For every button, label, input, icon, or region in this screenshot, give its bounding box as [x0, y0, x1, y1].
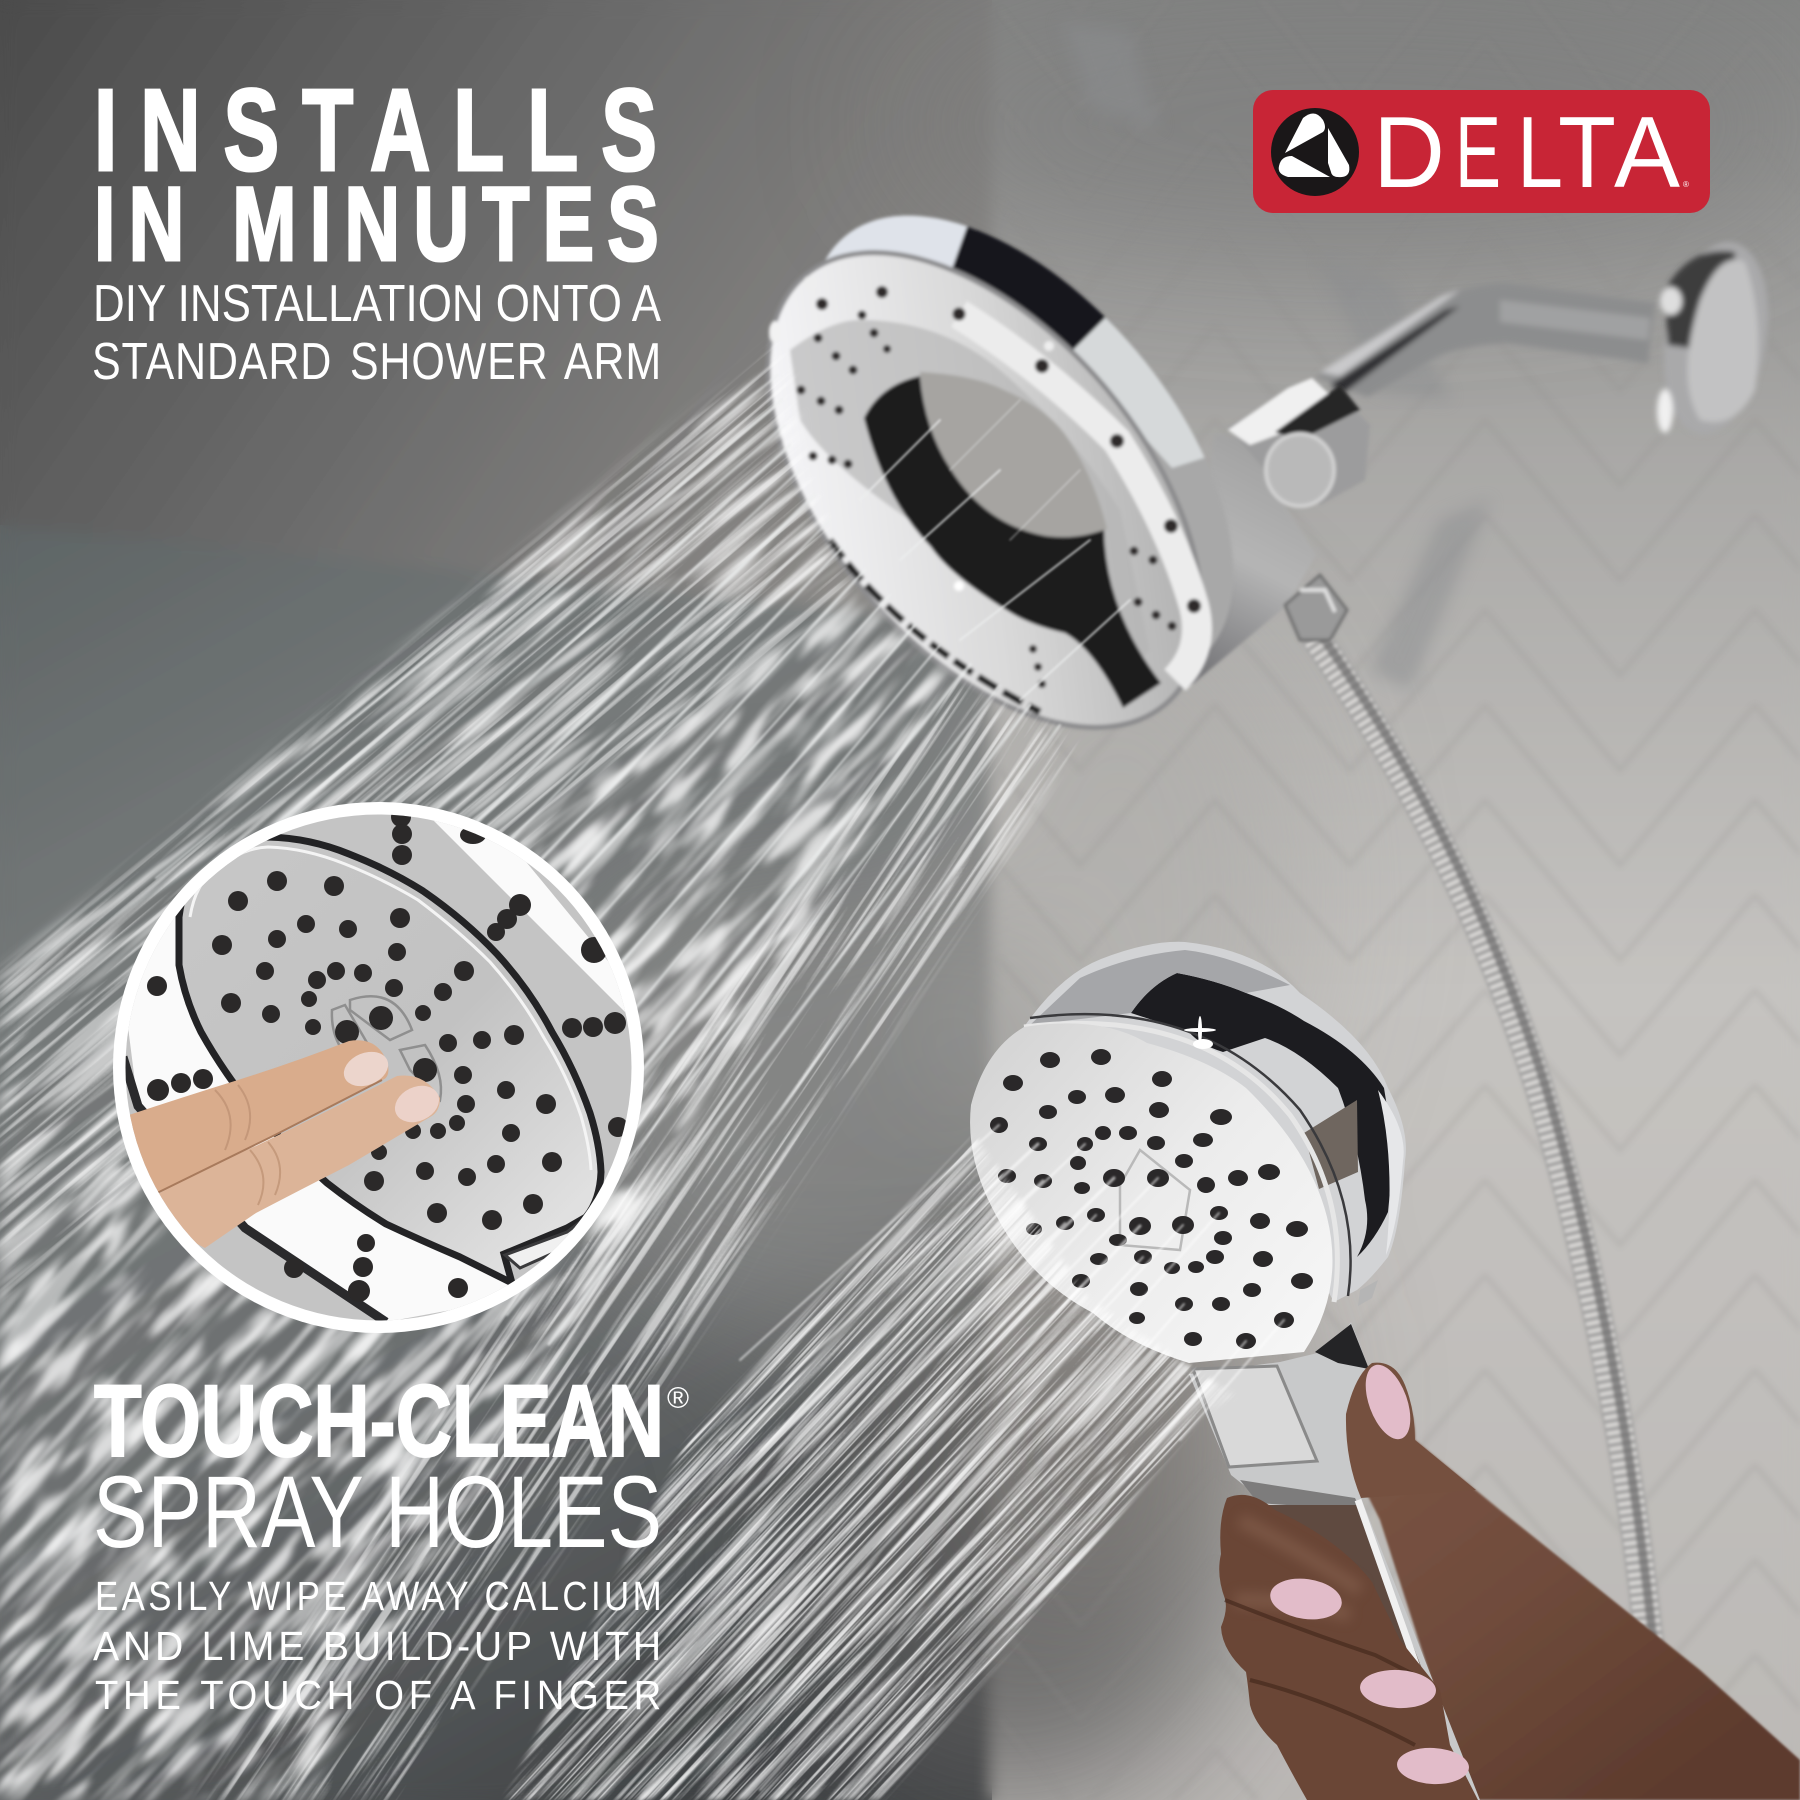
- back of the hand: [1345, 1385, 1800, 1800]
- text block: easily wipe away calcium: AND LIME BUILD-UP WITH: [93, 1623, 665, 1669]
- thumb gripping the handle: [1346, 1363, 1476, 1498]
- icon: Delta triangle emblem: [1271, 108, 1359, 196]
- heading: Touch-Clean spray holes: ®: [667, 1382, 689, 1415]
- hub and mount block connecting arm, head and hose: [1168, 378, 1370, 690]
- flexible metal hose: [1316, 636, 1654, 1650]
- inset circle: fingers wiping spray holes: [113, 800, 660, 1333]
- fingers: [120, 1040, 445, 1248]
- hand shower spray face with holes: [970, 1023, 1332, 1363]
- Delta logo badge: L: [1517, 97, 1563, 209]
- Delta logo badge: T: [1558, 97, 1616, 209]
- hand shower handle: [1189, 1322, 1480, 1800]
- Delta logo badge: [1253, 90, 1710, 213]
- shower arm and wall flange: [1315, 234, 1782, 442]
- large shower head ring: [766, 214, 1232, 731]
- text block: DIY installation: DIY INSTALLATION ONTO A: [93, 275, 661, 333]
- text block: easily wipe away calcium: THE TOUCH OF A FINGER: [95, 1672, 666, 1718]
- heading: Touch-Clean spray holes: TOUCH-CLEAN: [94, 1364, 664, 1478]
- Delta logo badge: A: [1614, 97, 1681, 209]
- water spray from the large head: [0, 350, 1132, 1800]
- text block: DIY installation: [92, 275, 662, 391]
- heading: Touch-Clean spray holes: SPRAY HOLES: [93, 1455, 662, 1569]
- text block: easily wipe away calcium: EASILY WIPE AWAY CALCIUM: [95, 1573, 665, 1619]
- water spray from the hand shower: [504, 1123, 1286, 1800]
- heading: Installs in minutes: INSTALLS: [94, 65, 680, 195]
- text block: DIY installation: STANDARD SHOWER ARM: [92, 333, 662, 391]
- heading: Touch-Clean spray holes: [93, 1364, 689, 1569]
- heading: Installs in minutes: [94, 65, 680, 283]
- hand shower body: [1024, 942, 1406, 1306]
- hand fingers with pink nails: [1219, 1359, 1478, 1800]
- Delta logo badge: D: [1373, 97, 1445, 209]
- heading: Installs in minutes: IN MINUTES: [94, 166, 672, 283]
- Delta logo badge: ®: [1683, 180, 1689, 189]
- Delta logo badge: E: [1455, 97, 1501, 209]
- text block: easily wipe away calcium: [93, 1573, 666, 1718]
